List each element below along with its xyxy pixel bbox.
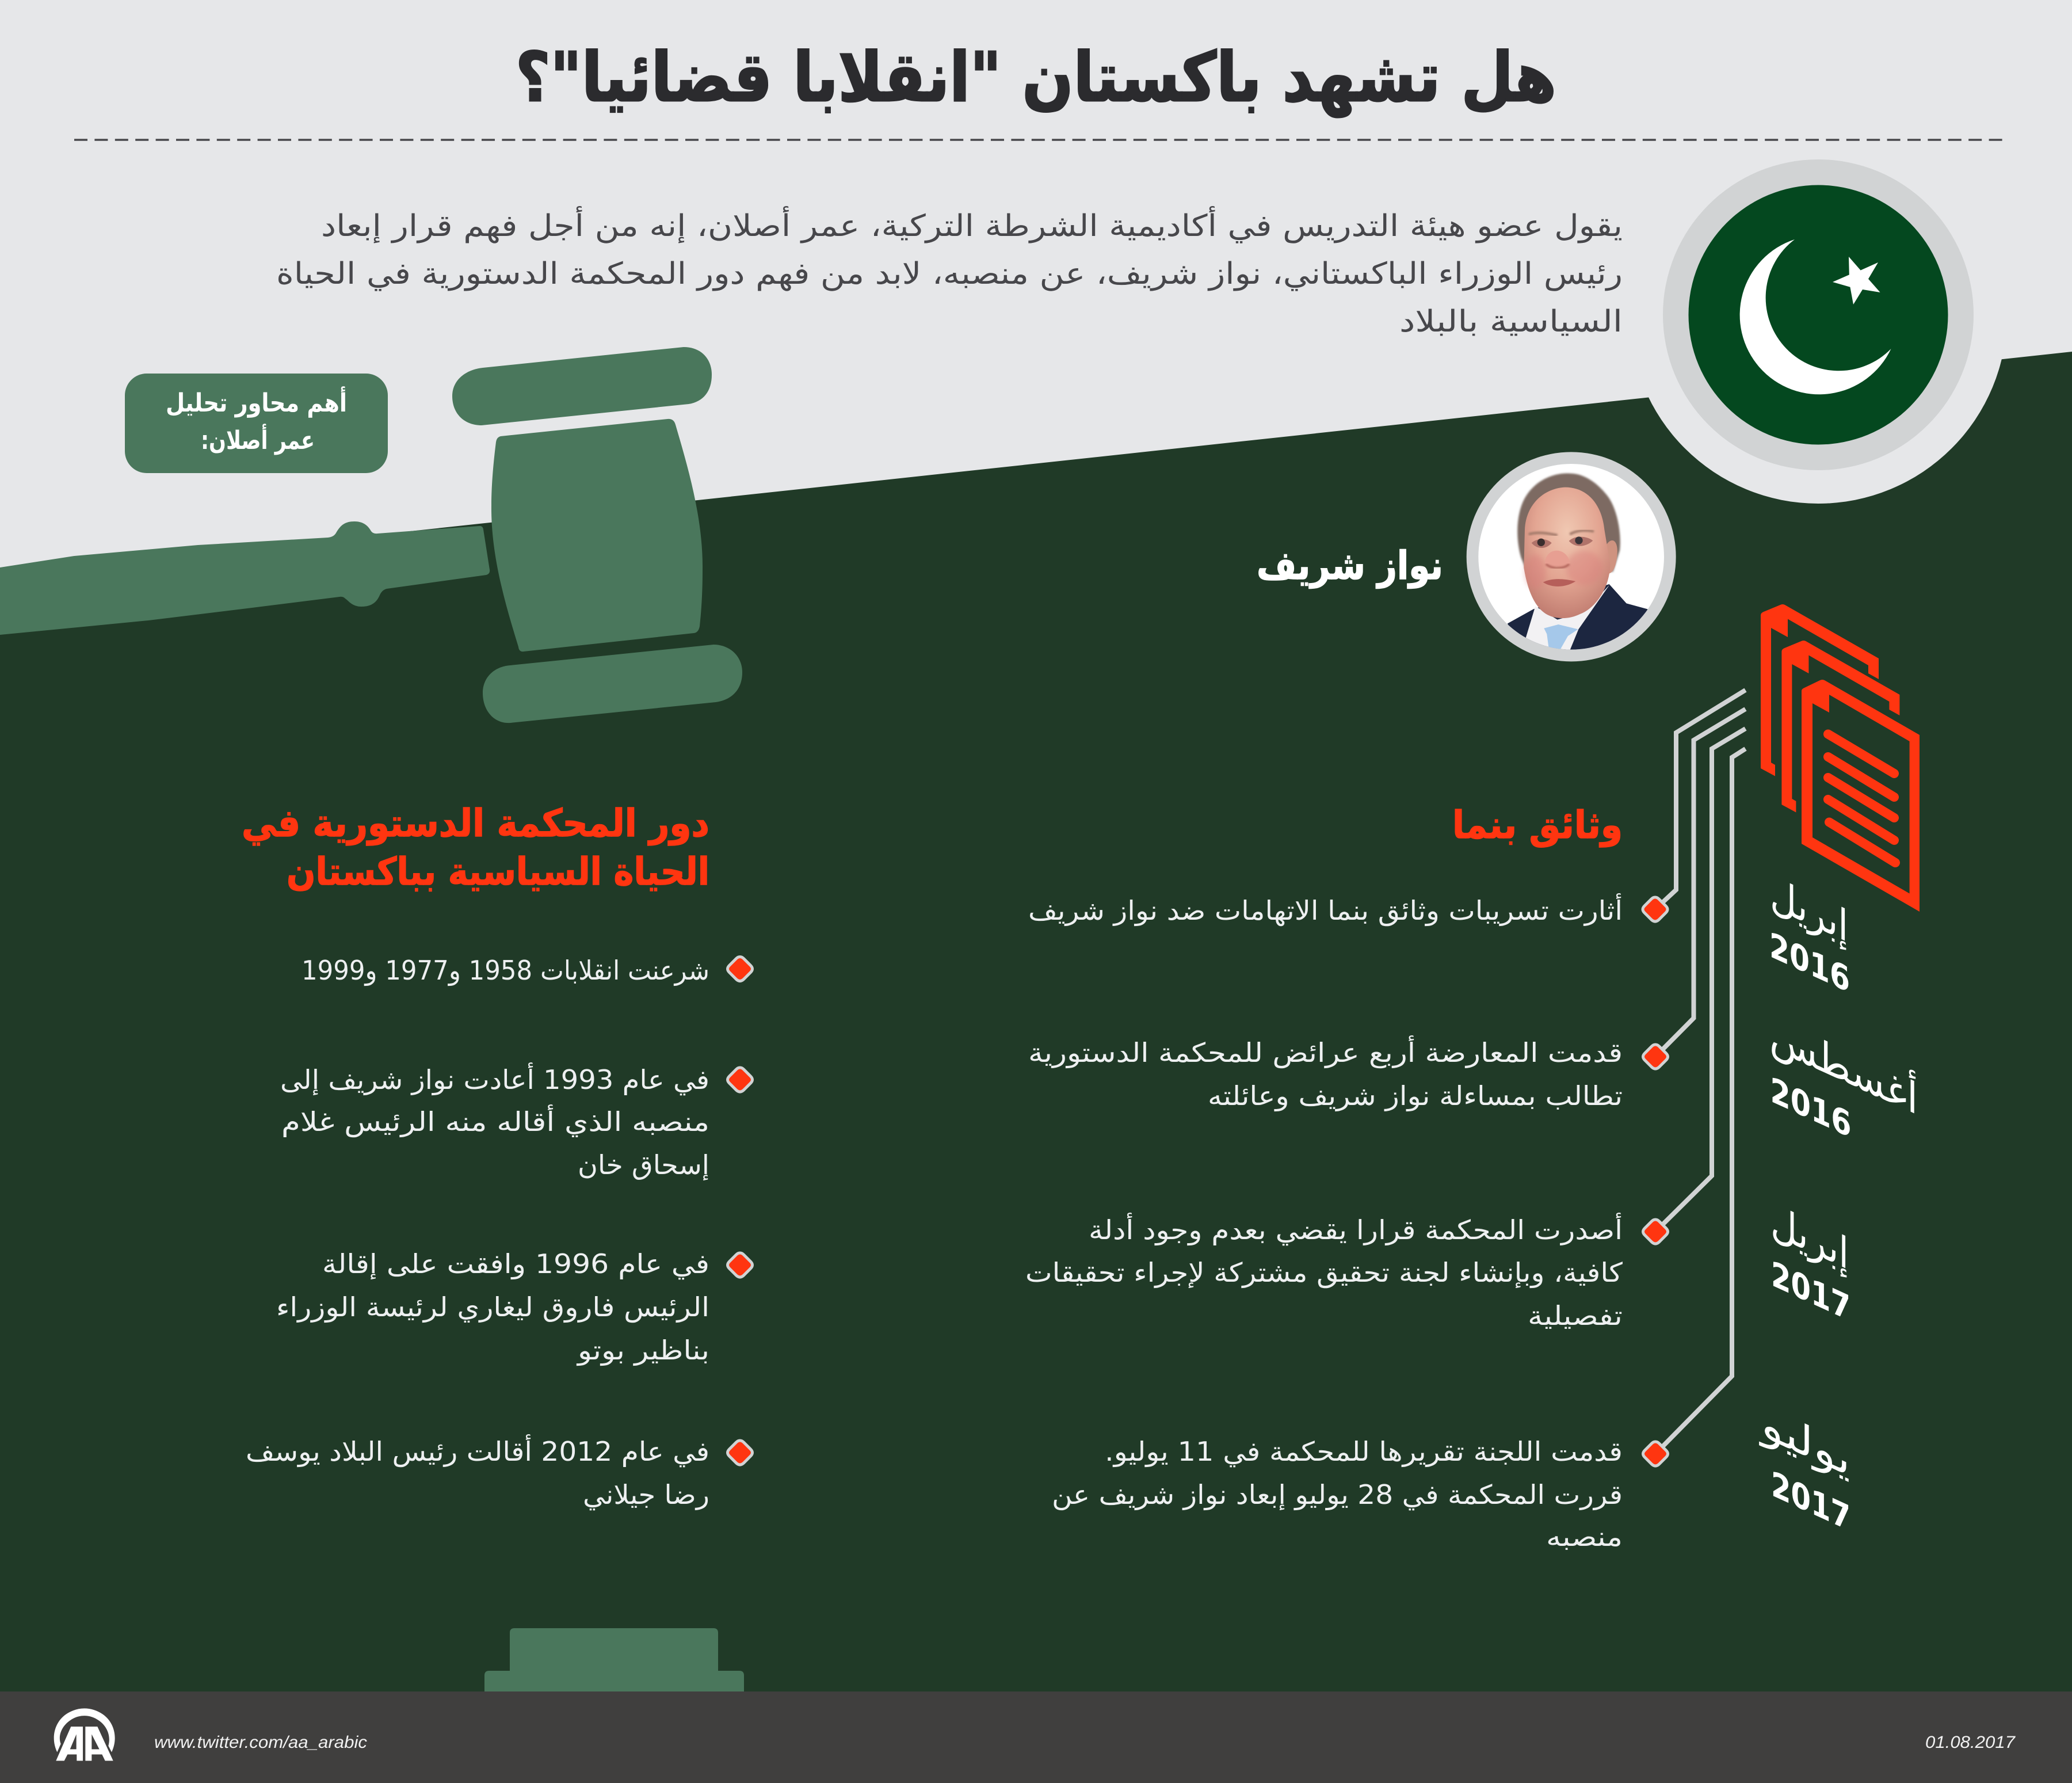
date: July 2017: 2017 [1771,1462,1850,1540]
face [1524,487,1610,618]
date: July 2017 [1758,1396,1850,1540]
item: August 2016 [1028,1035,1623,1112]
item: 1993: إسحاق خان [578,1149,709,1180]
item: July 2017: قررت المحكمة في 28 يوليو إبعاد نواز شريف عن [1052,1479,1623,1511]
item: coups: شرعنت انقلابات 1958 و1977 و1999 [302,955,709,986]
icon: documents [1761,604,1920,912]
background: dark green lower area [0,352,2072,1692]
date: August 2016: أغسطس [1769,1004,1918,1125]
title: هل تشهد باكستان "انقلابا قضائيا"؟ [516,37,1556,117]
item: 1996: في عام 1996 وافقت على إقالة [322,1248,709,1280]
court role text [246,955,709,1511]
date: August 2016: 2016 [1770,1069,1852,1146]
date: April 2016: إبريل [1770,867,1848,953]
icon: star [1833,257,1880,304]
tie [1544,624,1578,649]
gavel [0,347,744,1692]
date: April 2017: 2017 [1771,1252,1850,1329]
date: April 2016 [1769,867,1850,1001]
item: August 2016: تطالب بمساءلة نواز شريف وعائلته [1208,1080,1623,1112]
gavel base [484,1628,744,1692]
timeline bullets [1643,897,1667,1466]
portrait [1467,452,1676,661]
intro paragraph: السياسية بالبلاد [1399,304,1623,339]
nose [1546,550,1569,567]
gavel head body [491,419,703,652]
item: April 2017 [1025,1213,1623,1331]
date: July 2017: يوليو [1758,1396,1850,1487]
item: April 2016: أثارت تسريبات وثائق بنما الاتهامات ضد نواز شريف [1028,893,1623,927]
cheeks [1566,551,1602,585]
item: 1996 [276,1248,709,1366]
shirt [1526,585,1609,650]
callout pill: عمر أصلان: [201,424,315,455]
footer bar [0,1691,2072,1783]
heading: role of the constitutional court: الحياة السياسية بباكستان [287,849,709,894]
item: April 2017: أصدرت المحكمة قرارا يقضي بعدم وجود أدلة [1089,1213,1623,1246]
suit [1508,584,1648,650]
item: 1996: الرئيس فاروق ليغاري لرئيسة الوزراء [276,1291,709,1323]
item: July 2017 [1052,1436,1623,1552]
date: April 2016: 2016 [1769,924,1850,1001]
eyes [1532,537,1593,548]
dates [1758,867,1918,1540]
intro paragraph [276,206,1623,339]
heading: role of the constitutional court [242,801,709,894]
item: April 2017: تفصيلية [1528,1300,1623,1331]
item: July 2017: قدمت اللجنة تقريرها للمحكمة في 11 يوليو. [1105,1436,1623,1468]
flag badge [1630,126,2007,504]
gavel handle [0,521,490,635]
hair [1517,473,1620,572]
date: April 2017: إبريل [1770,1195,1849,1280]
item: 1993 [280,1062,709,1180]
court role bullets [727,957,753,1465]
timeline connectors [1655,690,1746,1454]
footer: date: 01.08.2017 [1925,1733,2016,1752]
brows [1529,531,1594,535]
gavel head top band [452,347,712,425]
item: August 2016: قدمت المعارضة أربع عرائض للمحكمة الدستورية [1028,1035,1623,1069]
item: April 2017: كافية، وبإنشاء لجنة تحقيق مشتركة لإجراء تحقيقات [1025,1257,1623,1289]
item: 2012: رضا جيلاني [583,1479,709,1511]
intro paragraph: رئيس الوزراء الباكستاني، نواز شريف، عن منصبه، لابد من فهم دور المحكمة الدستورية في الحياة [276,257,1623,291]
callout pill [125,374,388,473]
item: July 2017: منصبه [1546,1521,1623,1552]
name: نواز شريف [1257,543,1443,589]
item: 1993: في عام 1993 أعادت نواز شريف إلى [280,1062,709,1096]
logo: AA [54,1708,115,1761]
heading: role of the constitutional court: دور المحكمة الدستورية في [242,801,709,846]
callout pill: أهم محاور تحليل [166,386,347,418]
item: 1993: منصبه الذي أقاله منه الرئيس غلام [281,1104,709,1138]
ear [1607,540,1617,573]
item: 2012 [246,1434,709,1511]
mouth [1543,579,1575,586]
icon: crescent [1740,239,1891,394]
heading: Panama papers: وثائق بنما [1452,803,1623,848]
date: April 2017 [1770,1195,1850,1329]
gavel head bottom band [483,645,742,723]
footer: twitter url: www.twitter.com/aa_arabic [154,1733,367,1752]
item: 1996: بناظير بوتو [577,1335,709,1366]
item: 2012: في عام 2012 أقالت رئيس البلاد يوسف [246,1434,709,1468]
intro paragraph: يقول عضو هيئة التدريس في أكاديمية الشرطة التركية، عمر أصلان، إنه من أجل فهم قرار إبعاد [321,206,1623,243]
timeline text [1025,893,1623,1552]
